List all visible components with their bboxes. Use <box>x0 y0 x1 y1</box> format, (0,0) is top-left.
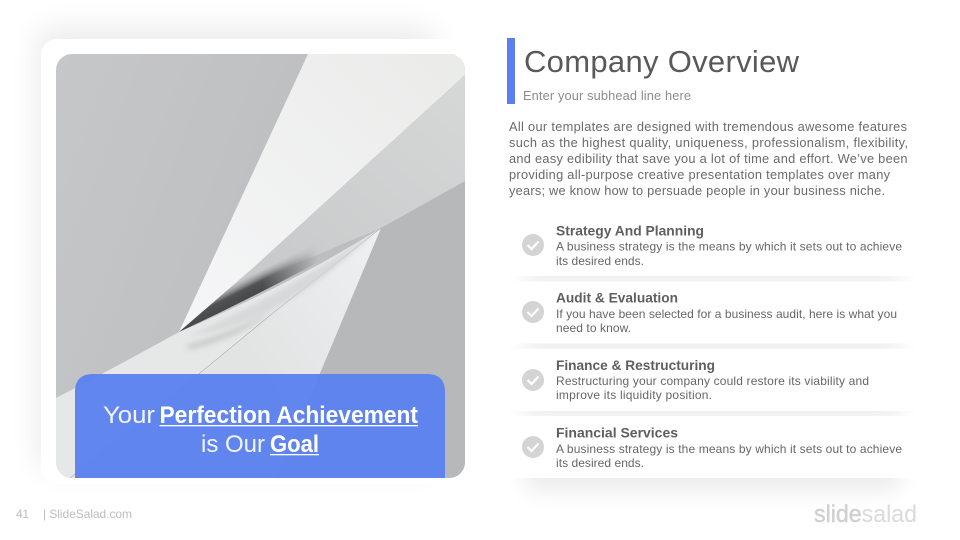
body paragraph: and easy edibility that save you a lot of time and effort. We’ve been <box>509 151 908 166</box>
title: Company Overview <box>524 44 800 79</box>
caption text: Your <box>103 402 155 429</box>
list item: Financial Services <box>509 416 916 478</box>
list item: Finance & Restructuring: Restructuring your company could restore its viability and <box>556 374 869 388</box>
list item: Finance & Restructuring <box>509 349 916 411</box>
heading accent bar <box>507 38 515 104</box>
body paragraph: All our templates are designed with tremendous awesome features <box>509 119 907 134</box>
card shadows <box>525 228 900 491</box>
caption text: is Our <box>201 431 265 458</box>
list item: Financial Services: A business strategy is the means by which it sets out to achieve <box>556 442 902 456</box>
caption text: Perfection Achievement <box>160 402 418 429</box>
photo card <box>36 26 471 484</box>
body paragraph: providing all-purpose creative presentation templates over many <box>509 167 891 182</box>
blue caption panel <box>75 374 445 478</box>
list item: Finance & Restructuring: Finance & Restructuring <box>556 357 715 373</box>
list item: Financial Services: its desired ends. <box>556 456 644 470</box>
list item: Audit & Evaluation: need to know. <box>556 321 631 335</box>
logo wordmark: slidesalad <box>814 501 917 528</box>
caption text <box>103 402 418 458</box>
body paragraph: years; we know how to persuade people in your business niche. <box>509 183 885 198</box>
footer site name: | SlideSalad.com <box>43 507 132 521</box>
subhead: Enter your subhead line here <box>523 88 691 103</box>
body paragraph: such as the highest quality, uniqueness, professionalism, flexibility, <box>509 135 908 150</box>
list item: Strategy And Planning: A business strategy is the means by which it sets out to achieve <box>556 240 902 254</box>
page number: 41 <box>16 507 29 521</box>
list item: Audit & Evaluation: Audit & Evaluation <box>556 290 678 306</box>
list item: Financial Services: Financial Services <box>556 424 678 440</box>
list item: Strategy And Planning <box>509 214 916 276</box>
list item: Strategy And Planning: its desired ends. <box>556 254 644 268</box>
icon: check <box>522 301 544 323</box>
list item: Audit & Evaluation <box>509 282 916 344</box>
body paragraph <box>509 119 908 198</box>
abstract white folds image <box>56 54 465 478</box>
icon: check <box>522 234 544 256</box>
list item: Finance & Restructuring: improve its liquidity position. <box>556 388 712 402</box>
caption text: Goal <box>270 431 319 458</box>
icon: check <box>522 436 544 458</box>
list item: Audit & Evaluation: If you have been selected for a business audit, here is what you <box>556 307 897 321</box>
icon: check <box>522 369 544 391</box>
list item: Strategy And Planning: Strategy And Planning <box>556 222 704 238</box>
